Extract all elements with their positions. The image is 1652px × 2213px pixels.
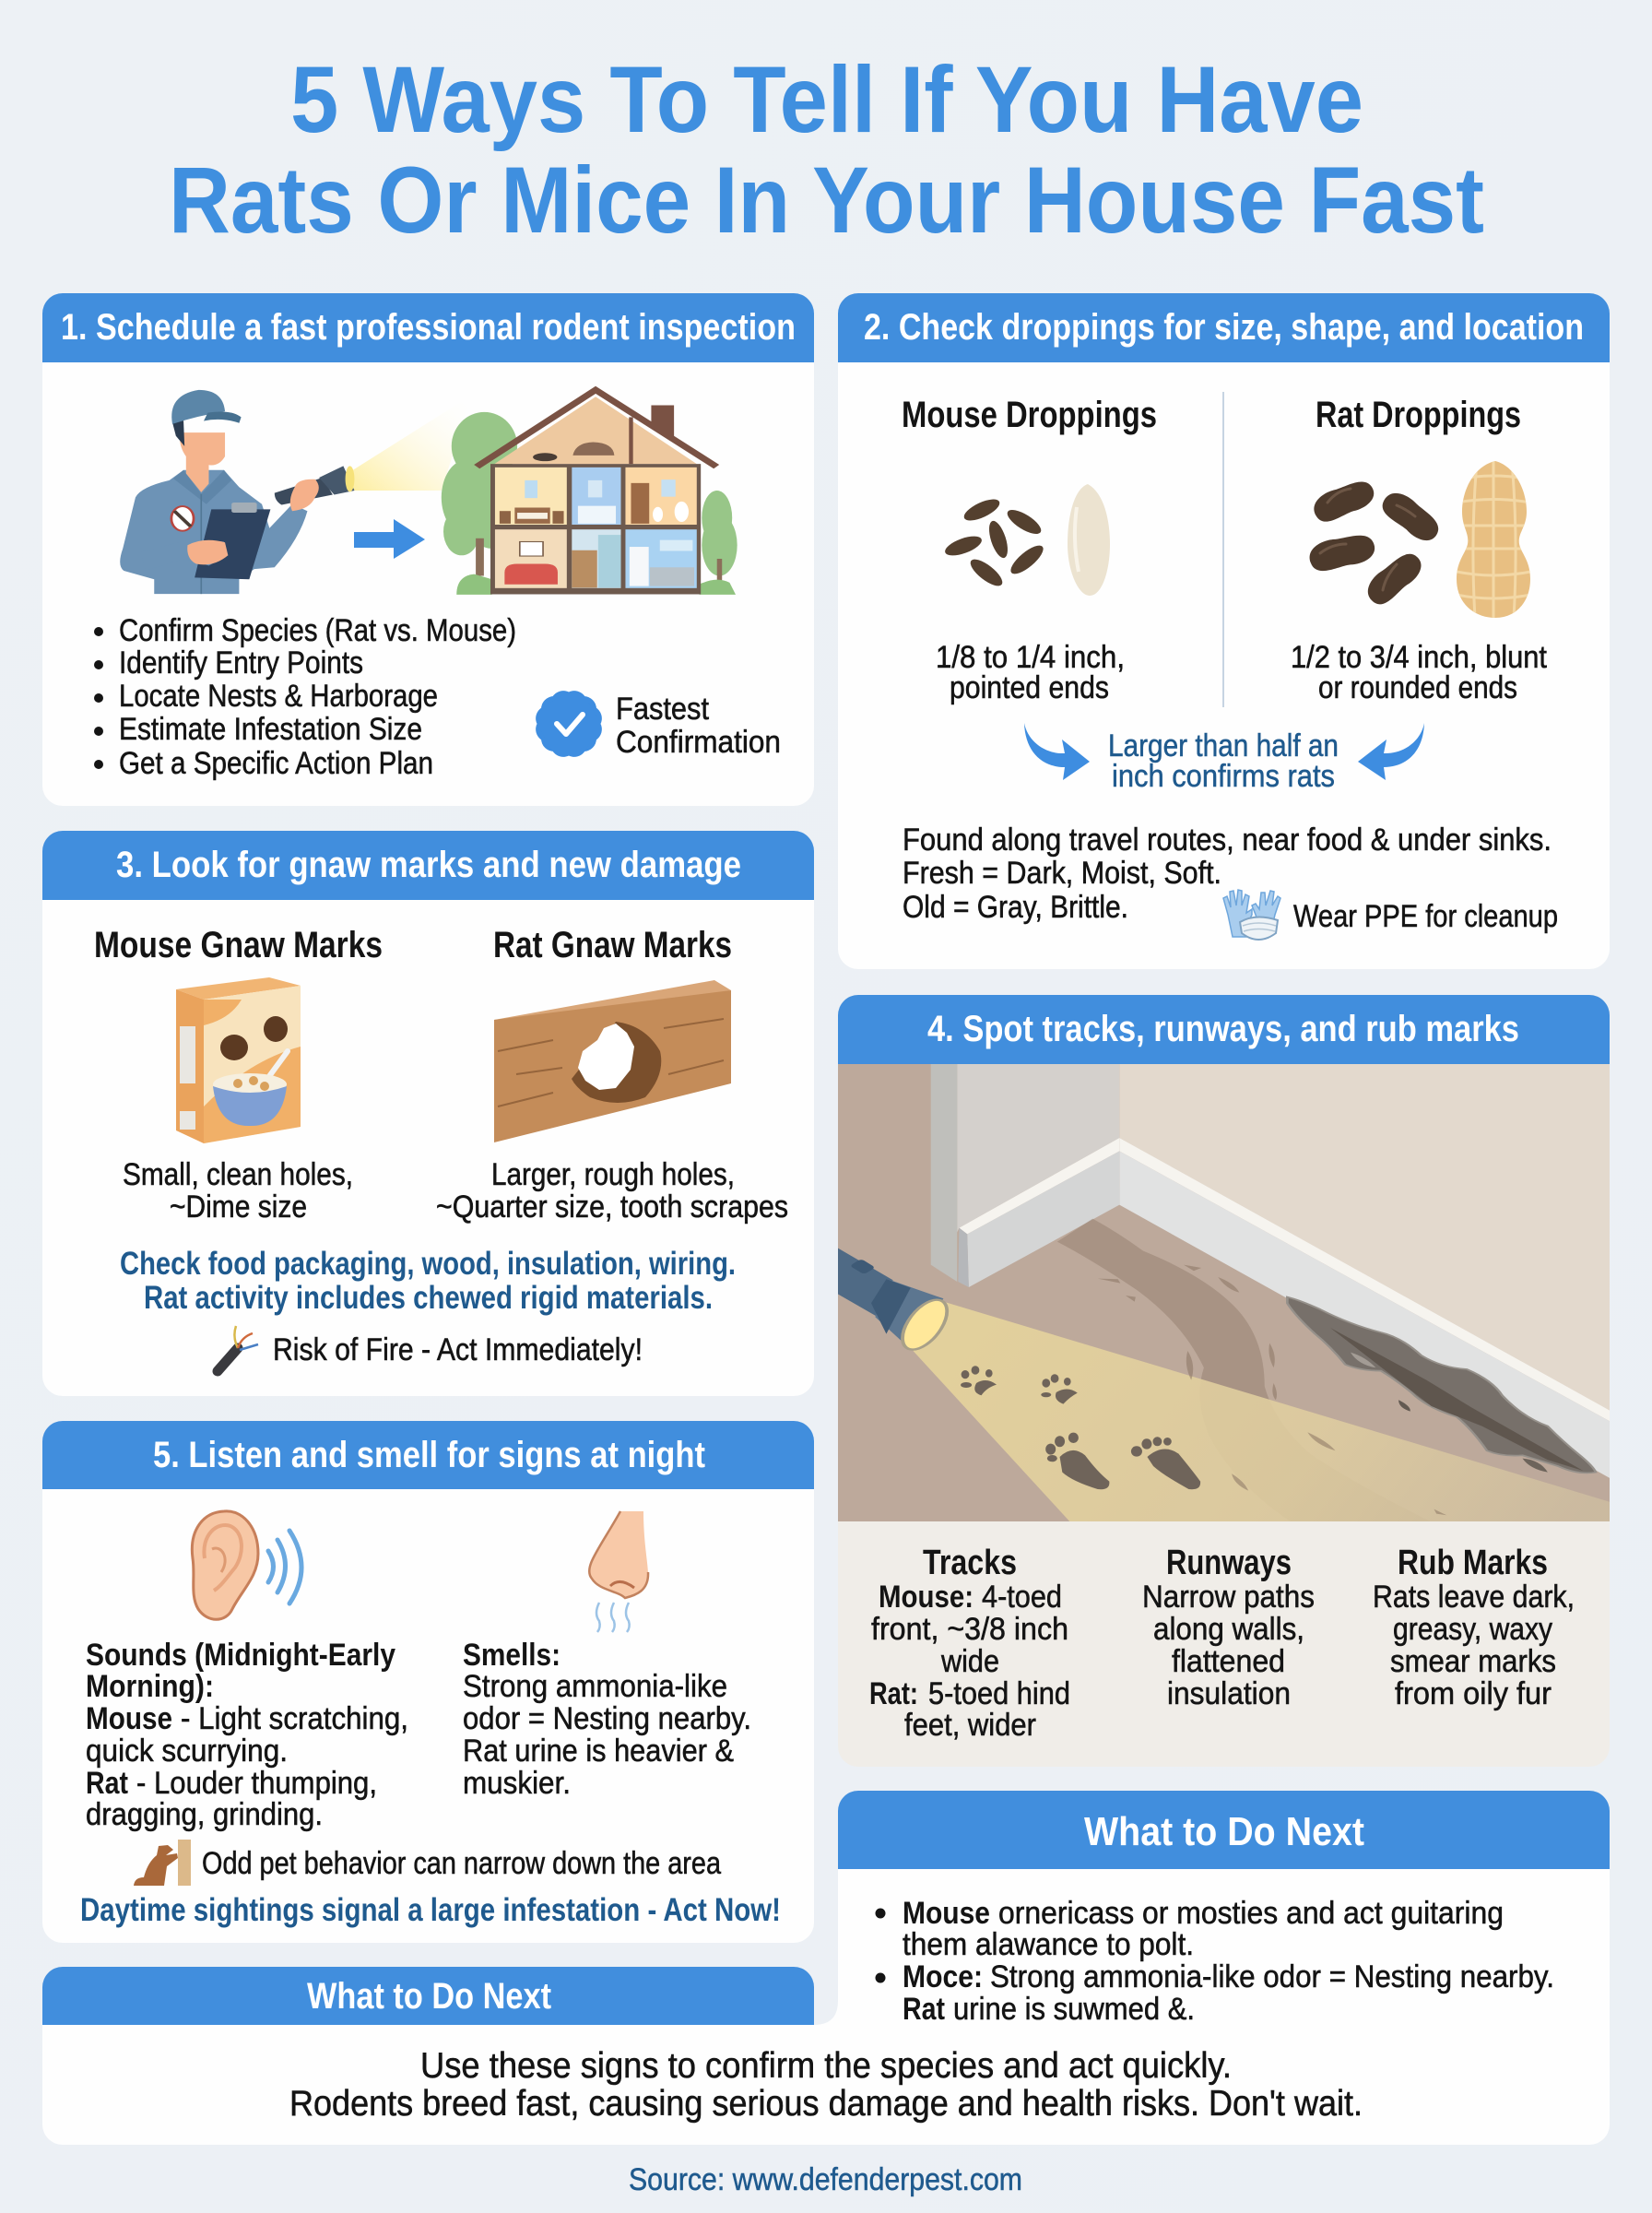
pet note: Odd pet behavior can narrow down the area (202, 1846, 721, 1881)
column: rub marks (1373, 1544, 1575, 1711)
title: 5 Ways To Tell If You Have (290, 47, 1363, 152)
callout: check materials: Rat activity includes chewed rigid materials. (144, 1280, 713, 1316)
panel 5 heading (42, 1421, 814, 1489)
title (169, 47, 1484, 253)
icon: chewed cable (218, 1326, 258, 1371)
panel 3 heading: 3. Look for gnaw marks and new damage (116, 845, 741, 885)
column: rub marks: from oily fur (1395, 1676, 1552, 1711)
column: runways: Narrow paths (1142, 1580, 1315, 1615)
column headings: Mouse Gnaw Marks (94, 925, 383, 965)
column: rub marks: Rub Marks (1398, 1544, 1548, 1582)
next steps list: Moce: (903, 1959, 983, 1994)
arrow (354, 519, 425, 559)
panel 4 heading: 4. Spot tracks, runways, and rub marks (927, 1009, 1519, 1049)
icon: cereal box (176, 977, 301, 1143)
column headings (902, 395, 1521, 435)
sounds text: Morning): (86, 1669, 214, 1704)
PPE note: Wear PPE for cleanup (1293, 899, 1558, 934)
column: runways: flattened (1172, 1644, 1285, 1679)
panel 3 heading (42, 831, 814, 900)
checklist: Estimate Infestation Size (119, 712, 422, 747)
icon: check badge (531, 686, 607, 762)
sounds text: Rat (86, 1766, 128, 1801)
size descriptions (936, 640, 1547, 705)
sounds text (86, 1638, 408, 1832)
column headings: Mouse Droppings (902, 395, 1157, 435)
size descriptions: pointed ends (950, 670, 1109, 705)
gnaw descriptions (123, 1157, 788, 1225)
column: tracks: 4-toed (982, 1580, 1062, 1615)
column: runways: insulation (1167, 1676, 1291, 1711)
column: rub marks: Rats leave dark, (1373, 1580, 1575, 1615)
arrow: left curved (1024, 723, 1090, 780)
gnaw descriptions: ~Dime size (170, 1189, 307, 1225)
callout: check materials (120, 1246, 736, 1316)
fastest confirmation label: Fastest (616, 692, 709, 727)
checklist: Locate Nests & Harborage (119, 679, 438, 714)
column headings: Rat Droppings (1316, 395, 1521, 435)
panel 1 heading (42, 293, 814, 362)
column headings (94, 925, 732, 965)
arrow: right curved (1358, 723, 1424, 780)
next steps list (876, 1896, 1554, 2027)
next steps list: Rat (903, 1992, 945, 2027)
icon: gloves and mask (1223, 890, 1280, 940)
sounds text: - Louder thumping, (136, 1766, 377, 1801)
illustration: flashlight on floor scene (830, 1060, 1619, 1524)
callout: rat size (1108, 728, 1339, 794)
smells text (463, 1638, 751, 1801)
column: tracks: 5-toed hind (928, 1676, 1070, 1711)
sounds text: Mouse (86, 1701, 172, 1736)
smells text: Smells: (463, 1638, 560, 1673)
droppings notes: Found along travel routes, near food & under sinks. (903, 822, 1552, 858)
column: tracks: Tracks (923, 1544, 1017, 1582)
sounds text: - Light scratching, (181, 1701, 408, 1736)
icon: dog at wall (134, 1840, 191, 1886)
callout: check materials: Check food packaging, wood, insulation, wiring. (120, 1246, 736, 1282)
fastest confirmation label: Confirmation (616, 725, 781, 760)
droppings notes (903, 822, 1552, 925)
column: tracks: Mouse: (879, 1580, 974, 1615)
right heading: what to do next: What to Do Next (1084, 1809, 1364, 1854)
smells text: muskier. (463, 1766, 571, 1801)
checklist: Get a Specific Action Plan (119, 746, 433, 781)
callout: rat size: inch confirms rats (1112, 759, 1335, 794)
panel 5 heading: 5. Listen and smell for signs at night (153, 1435, 705, 1475)
column: rub marks: greasy, waxy (1393, 1612, 1552, 1647)
panel 4 heading (838, 995, 1610, 1064)
panel: what to do next (combined) (42, 1791, 1610, 2145)
checklist: Confirm Species (Rat vs. Mouse) (119, 613, 516, 648)
icon: rat droppings and peanut (1305, 461, 1530, 618)
fire warning: Risk of Fire - Act Immediately! (273, 1332, 643, 1367)
column: runways: along walls, (1153, 1612, 1304, 1647)
left heading: what to do next (42, 1967, 814, 2025)
gnaw descriptions: ~Quarter size, tooth scrapes (436, 1189, 788, 1225)
icon: mouse droppings and rice (943, 484, 1110, 596)
panel 1 heading: 1. Schedule a fast professional rodent inspection (61, 307, 796, 348)
panel 4: tracks, runways, rub marks (830, 995, 1619, 1767)
callout: rat size: Larger than half an (1108, 728, 1339, 763)
left heading: what to do next: What to Do Next (307, 1976, 551, 2017)
next steps list: Strong ammonia-like odor = Nesting nearby. (990, 1959, 1554, 1994)
icon: gnawed wood beam (494, 980, 731, 1142)
column: runways: Runways (1166, 1544, 1292, 1582)
panel 1: professional inspection (42, 293, 814, 806)
next steps list: ornericass or mosties and act guitaring (998, 1896, 1504, 1931)
title: Rats Or Mice In Your House Fast (169, 148, 1484, 253)
fastest confirmation label (616, 692, 781, 760)
closing message: Use these signs to confirm the species and act quickly. (420, 2046, 1232, 2086)
column: tracks: wide (940, 1644, 999, 1679)
sounds text: Sounds (Midnight-Early (86, 1638, 395, 1673)
column headings: Rat Gnaw Marks (493, 925, 732, 965)
droppings notes: Fresh = Dark, Moist, Soft. (903, 856, 1221, 891)
panel 2: droppings (838, 293, 1610, 969)
column: runways (1142, 1544, 1315, 1711)
column: tracks: front, ~3/8 inch (871, 1612, 1068, 1647)
source line: Source: www.defenderpest.com (629, 2162, 1022, 2197)
gnaw descriptions: Larger, rough holes, (491, 1157, 735, 1192)
checklist (94, 613, 516, 781)
right heading: what to do next (838, 1791, 1610, 1869)
droppings notes: Old = Gray, Brittle. (903, 890, 1128, 925)
column: tracks (869, 1544, 1070, 1743)
panel 2 heading (838, 293, 1610, 362)
icon: nose with smell lines (589, 1511, 648, 1632)
checklist: Identify Entry Points (119, 645, 363, 680)
smells text: Rat urine is heavier & (463, 1734, 734, 1769)
size descriptions: 1/8 to 1/4 inch, (936, 640, 1125, 675)
illustration: house cutaway (442, 390, 738, 595)
sounds text: quick scurrying. (86, 1734, 288, 1769)
next steps list: Mouse (903, 1896, 990, 1931)
icon: ear with sound waves (192, 1511, 301, 1619)
size descriptions: or rounded ends (1318, 670, 1517, 705)
column: rub marks: smear marks (1390, 1644, 1556, 1679)
illustration: inspector with flashlight (120, 390, 472, 594)
column: tracks: feet, wider (904, 1708, 1036, 1743)
closing message: Rodents breed fast, causing serious damage and health risks. Don't wait. (289, 2084, 1363, 2124)
smells text: Strong ammonia-like (463, 1669, 727, 1704)
closing message (289, 2046, 1363, 2124)
column: tracks: Rat: (869, 1676, 918, 1711)
next steps list: them alawance to polt. (903, 1927, 1194, 1962)
next steps list: urine is suwmed &. (953, 1992, 1195, 2027)
smells text: odor = Nesting nearby. (463, 1701, 751, 1736)
panel 5: listen and smell (42, 1421, 814, 1943)
sounds text: dragging, grinding. (86, 1797, 323, 1832)
panel 3: gnaw marks (42, 831, 814, 1396)
size descriptions: 1/2 to 3/4 inch, blunt (1291, 640, 1547, 675)
gnaw descriptions: Small, clean holes, (123, 1157, 353, 1192)
callout: daytime sightings: Daytime sightings signal a large infestation - Act Now! (80, 1892, 781, 1928)
